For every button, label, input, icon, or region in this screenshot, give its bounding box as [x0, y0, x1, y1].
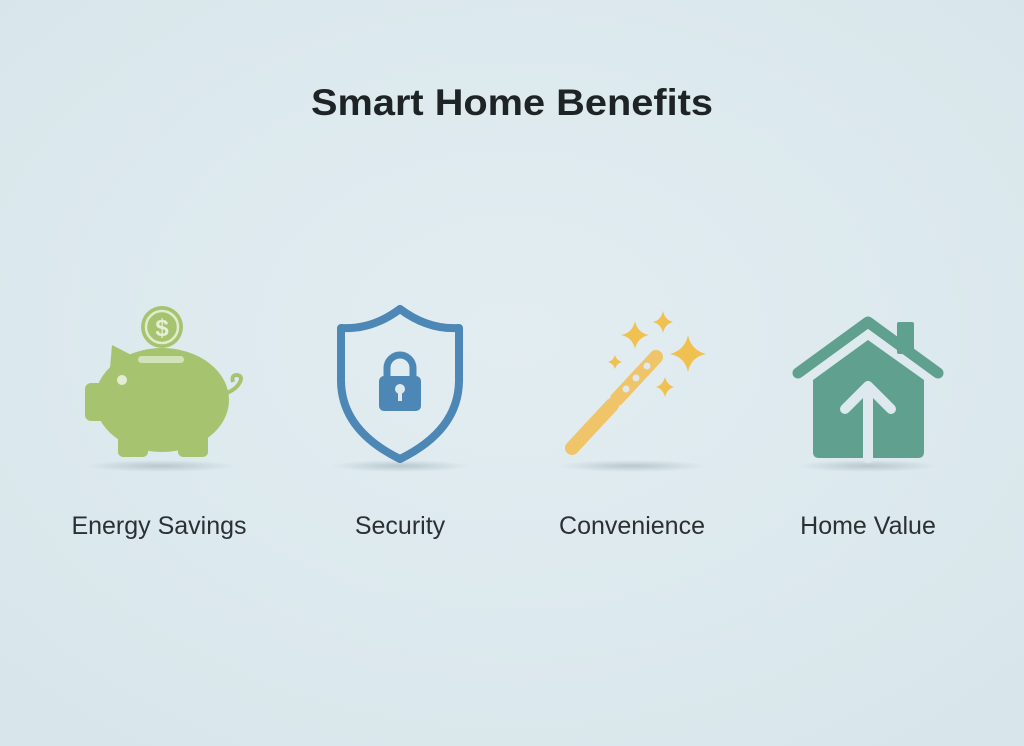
label: Convenience: Convenience: [559, 512, 705, 540]
icon: house with arrow: [798, 322, 938, 472]
title: Smart Home Benefits: [311, 82, 713, 123]
label: Security: Security: [355, 512, 446, 540]
icon: piggy bank: [85, 306, 241, 472]
label: Energy Savings: Energy Savings: [71, 512, 247, 540]
label: Home Value: Home Value: [800, 512, 936, 540]
icon: piggy bank: $: [155, 315, 169, 342]
icon: magic wand: [557, 311, 707, 472]
icon: shield with lock: [330, 309, 470, 472]
